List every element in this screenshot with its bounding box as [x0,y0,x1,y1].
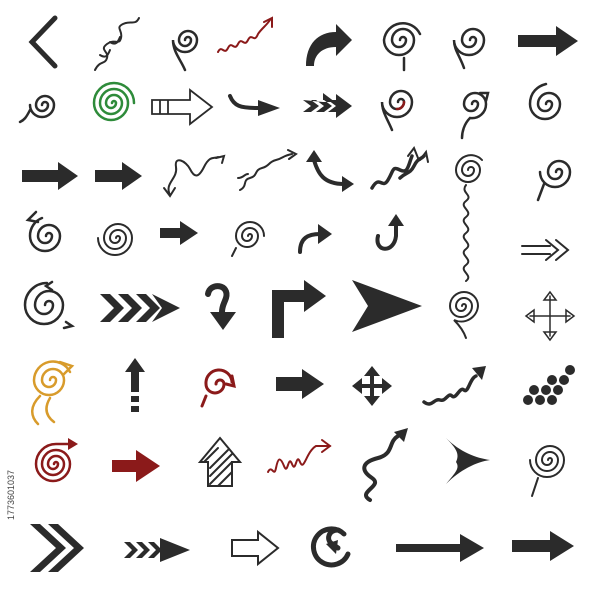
icon: corner arrow [272,280,326,338]
icon: wavy arrow [238,150,296,190]
icon: outline arrow [152,90,212,124]
icon: outline arrow [232,532,278,564]
icon: chevron arrow [303,93,352,118]
icon: spiral [530,84,560,119]
icon: spiral tail [173,31,197,70]
row 3 icons [22,148,570,281]
icon: spiral arrow [462,93,488,138]
icon: striped up arrow [200,438,240,486]
icon: red concentric spiral [36,438,78,481]
icon: dots arrow [523,365,575,405]
icon: arrow [276,369,324,399]
icon: red wavy arrow [268,440,330,472]
icon: four-way cross [352,366,392,406]
icon: arrow [22,162,78,190]
icon: up arrow [125,358,145,412]
icon: squiggle arrow [364,428,408,500]
icon: arrowhead [446,438,490,484]
row 2 icons [20,83,560,138]
icon: red arrow [112,450,160,482]
icon: chevron arrow [124,538,190,562]
icon: hook arrow [377,214,404,249]
icon: spiral [384,23,420,70]
icon: spiral long tail [456,155,482,281]
row 8 icons [30,524,574,572]
row 4 icons [28,212,568,260]
row 1 icons [32,18,578,70]
icon: small spiral tail [20,96,54,122]
icon: bent arrow [230,96,280,116]
icon: big right arrow [518,26,578,56]
icon: arrow two [95,162,142,190]
icon: outline double arrow [522,240,568,260]
icon: red squiggle arrow [218,18,272,52]
icon: spiral tail [538,161,570,200]
icon: four-way outline arrows [526,292,574,340]
icon: red spiral [202,370,234,406]
watermark id text: 1773601037 [6,470,16,520]
row 6 icons [32,358,575,424]
icon: curved arrow [300,224,332,252]
icon: curved arrow filled [306,24,352,66]
icon: chevron left [32,18,55,66]
row 5 icons [25,280,574,340]
icon: double chevron [30,524,84,572]
icon: hook down arrow [208,286,236,330]
icon: green spiral [94,83,134,120]
icon: circular arrow [313,529,348,565]
icon: chevrons [100,294,180,322]
icon: squiggle arrows [372,148,428,188]
icon: spiral [232,222,264,256]
icon: squiggle arrow [424,366,486,404]
icon: red spiral [382,91,412,130]
icon: spiral two [454,29,484,68]
icon: spiral [450,292,478,338]
icon: spiral arrow [28,212,60,251]
icon: spiral [530,446,564,496]
icon: long arrow [396,534,484,562]
row 7 icons [36,428,564,500]
icon: orange spiral [32,361,72,424]
icon: spiral [98,224,132,255]
icon: circular arrows [25,282,72,328]
icon: arrow [512,531,574,561]
icon: big arrowhead [352,280,422,332]
icon: small arrow [160,221,198,245]
icon: coil squiggle [95,18,139,70]
icon: wavy down arrow [164,156,224,196]
icon: double curved arrow [306,150,354,192]
